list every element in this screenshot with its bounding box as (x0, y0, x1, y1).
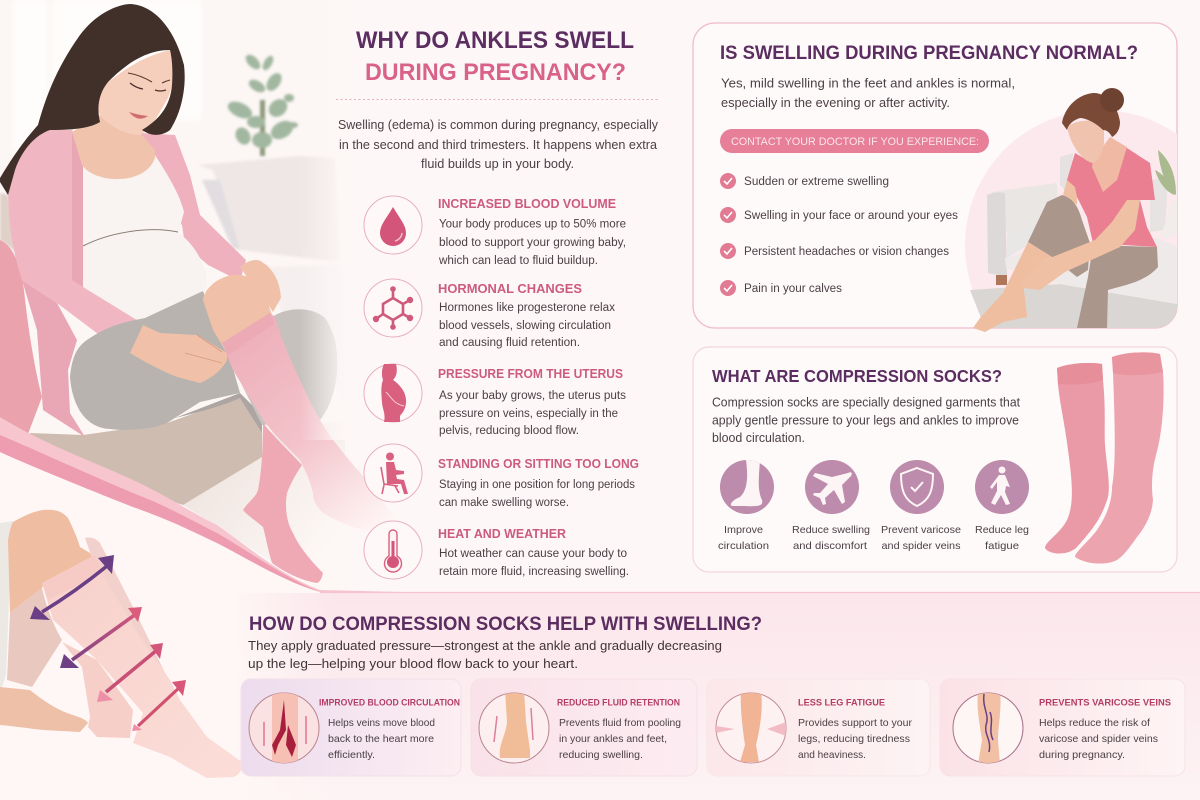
card: reduced fluid retention (471, 679, 697, 776)
neck (1092, 137, 1127, 192)
illustration: woman holding ankle (965, 88, 1177, 332)
cause: heat and weather: HEAT AND WEATHER (438, 527, 566, 541)
cause: heat and weather: Hot weather can cause your body to (439, 548, 627, 560)
arrow 2 (60, 607, 142, 668)
card: less leg fatigue: LESS LEG FATIGUE (798, 698, 885, 708)
cause: hormonal changes (364, 279, 615, 349)
intro text: in the second and third trimesters. It happens when extra (339, 138, 657, 152)
card: less leg fatigue: Provides support to your (798, 717, 912, 729)
cause: standing or sitting too long: Staying in one position for long periods (439, 479, 635, 491)
cause: pressure from the uterus (364, 364, 626, 437)
title: WHY DO ANKLES SWELL (356, 27, 634, 54)
cause: pressure from the uterus: As your baby grows, the uterus puts (439, 390, 626, 402)
arrow 1 (30, 555, 114, 620)
back sock on other leg (243, 423, 323, 583)
panel: what are compression socks (693, 347, 1177, 572)
checklist: Pain in your calves (744, 283, 842, 295)
card: less leg fatigue: legs, reducing tiredness (798, 733, 910, 745)
card: less leg fatigue (706, 692, 930, 776)
grey pants (70, 291, 240, 430)
cause: hormonal changes: blood vessels, slowing circulation (439, 320, 611, 332)
near leg (1028, 195, 1090, 277)
card: prevents varicose veins: varicose and spider veins (1039, 733, 1158, 745)
face, neck and hair (0, 4, 185, 195)
card: prevents varicose veins (940, 679, 1185, 776)
intro text (721, 76, 1015, 110)
icon: seated person (364, 444, 422, 502)
benefit: reduce fatigue: fatigue (985, 540, 1019, 552)
cause: increased blood volume: which can lead to fluid buildup. (438, 255, 598, 267)
checklist: Persistent headaches or vision changes (744, 246, 949, 258)
card: reduced fluid retention: REDUCED FLUID RETENTION (557, 698, 680, 708)
far leg (1077, 245, 1158, 328)
section text: They apply graduated pressure—strongest at the ankle and gradually decreasing (248, 638, 722, 653)
white top (82, 155, 184, 246)
icon: leg support (716, 692, 786, 763)
front sock (222, 313, 395, 531)
arrow 3 (97, 643, 163, 702)
card: improved blood circulation: Helps veins move blood (328, 717, 435, 729)
body text: blood circulation. (712, 431, 805, 445)
card: reduced fluid retention: reducing swelling. (559, 749, 643, 761)
intro text (338, 118, 659, 171)
bottom band background (225, 592, 1200, 800)
benefit: prevent veins (881, 460, 961, 552)
decorative pink swoosh (0, 417, 400, 592)
icon: varicose veins leg (953, 690, 1023, 764)
card: reduced fluid retention: Prevents fluid from pooling (559, 717, 681, 729)
benefit: reduce swelling: Reduce swelling (792, 524, 870, 536)
icon: swollen foot (479, 690, 549, 763)
knee and hands (130, 260, 281, 383)
cause: hormonal changes: Hormones like progesterone relax (439, 302, 615, 314)
section heading: HOW DO COMPRESSION SOCKS HELP WITH SWELLING? (249, 613, 762, 635)
illustration: pair of socks (1045, 352, 1164, 564)
cause: increased blood volume: Your body produces up to 50% more (439, 218, 626, 230)
soft fade right of photo (300, 0, 350, 440)
icon: molecule (364, 279, 422, 337)
card: prevents varicose veins: during pregnancy. (1039, 749, 1125, 761)
checklist: Sudden or extreme swelling (744, 176, 889, 188)
icon: pregnant silhouette (364, 364, 422, 422)
benefit: improve circulation: Improve (724, 524, 763, 536)
arm and hand (1022, 200, 1140, 290)
callout pill: CONTACT YOUR DOCTOR IF YOU EXPERIENCE: (731, 136, 979, 148)
icon: thermometer (364, 521, 422, 579)
cause: heat and weather (364, 521, 629, 579)
card: improved blood circulation: IMPROVED BLOOD CIRCULATION (319, 698, 460, 708)
cardigan front panel (22, 280, 85, 437)
checklist: Swelling in your face or around your eyes (744, 210, 958, 222)
card: prevents varicose veins: Helps reduce the risk of (1039, 717, 1150, 729)
card: prevents varicose veins: PREVENTS VARICOSE VEINS (1039, 698, 1171, 708)
cardigan shoulder and sleeve (8, 130, 145, 367)
checklist (720, 173, 958, 296)
cause: increased blood volume: INCREASED BLOOD VOLUME (438, 197, 616, 211)
intro text: especially in the evening or after activity. (721, 96, 950, 110)
panel: is swelling normal (692, 22, 1178, 332)
arrow 4 (132, 680, 186, 731)
icon: vein cross-section (249, 690, 319, 766)
illustration: leg with compression sock and arrows (0, 510, 243, 778)
benefit: reduce fatigue (975, 460, 1029, 552)
bare foot (973, 283, 1027, 332)
benefit: reduce swelling: and discomfort (793, 540, 867, 552)
card: less leg fatigue: and heaviness. (798, 749, 866, 761)
benefit: prevent veins: and spider veins (882, 540, 960, 552)
card: improved blood circulation: back to the heart more (328, 733, 434, 745)
cause: standing or sitting too long: STANDING OR SITTING TOO LONG (438, 457, 639, 471)
intro text: fluid builds up in your body. (421, 157, 574, 171)
section text (248, 638, 722, 671)
card: reduced fluid retention: in your ankles and feet, (559, 733, 667, 745)
title (356, 27, 634, 86)
intro text: Yes, mild swelling in the feet and ankles is normal, (721, 76, 1015, 90)
body text: apply gentle pressure to your legs and ankles to improve (712, 414, 1019, 428)
card: improved blood circulation: efficiently. (328, 749, 375, 761)
cause: standing or sitting too long: can make swelling worse. (439, 497, 569, 509)
section text: up the leg—helping your blood flow back to your heart. (248, 656, 578, 671)
shin (1003, 242, 1052, 320)
icon: potted plant (225, 52, 298, 156)
floor under sofa (183, 420, 345, 592)
title: DURING PREGNANCY? (365, 59, 626, 86)
cause: heat and weather: retain more fluid, increasing swelling. (439, 566, 629, 578)
sofa seat (30, 397, 262, 505)
benefit: reduce swelling (792, 460, 870, 552)
upper arm (1063, 180, 1077, 205)
cause: increased blood volume (364, 196, 626, 267)
cause: hormonal changes: and causing fluid retention. (439, 337, 580, 349)
belly (83, 230, 207, 322)
callout pill (720, 129, 989, 153)
benefit: improve circulation: circulation (718, 540, 769, 552)
shirt (1067, 140, 1157, 247)
heading: WHAT ARE COMPRESSION SOCKS? (712, 366, 1002, 386)
card: improved blood circulation (241, 679, 461, 776)
head (1067, 121, 1104, 163)
sofa back cushions (0, 156, 345, 400)
icon: blood drop (364, 196, 422, 254)
white lower-left area (0, 452, 320, 800)
pillow (0, 240, 42, 434)
cause: standing or sitting too long (364, 444, 639, 509)
body text (712, 396, 1020, 445)
cause: hormonal changes: HORMONAL CHANGES (438, 282, 582, 296)
cardigan right side (140, 133, 246, 281)
body text: Compression socks are specially designed garments that (712, 396, 1020, 410)
cause: pressure from the uterus: PRESSURE FROM THE UTERUS (438, 367, 623, 381)
benefit: prevent veins: Prevent varicose (881, 524, 961, 536)
cause: pressure from the uterus: pressure on veins, especially in the (439, 408, 618, 420)
heading: IS SWELLING DURING PREGNANCY NORMAL? (720, 42, 1138, 64)
benefit: reduce fatigue: Reduce leg (975, 524, 1029, 536)
illustration: pregnant woman on sofa (0, 0, 395, 592)
cause: increased blood volume: blood to support your growing baby, (439, 237, 626, 249)
benefit: improve circulation (718, 460, 774, 552)
intro text: Swelling (edema) is common during pregnancy, especially (338, 118, 659, 132)
cause: pressure from the uterus: pelvis, reducing blood flow. (439, 425, 579, 437)
